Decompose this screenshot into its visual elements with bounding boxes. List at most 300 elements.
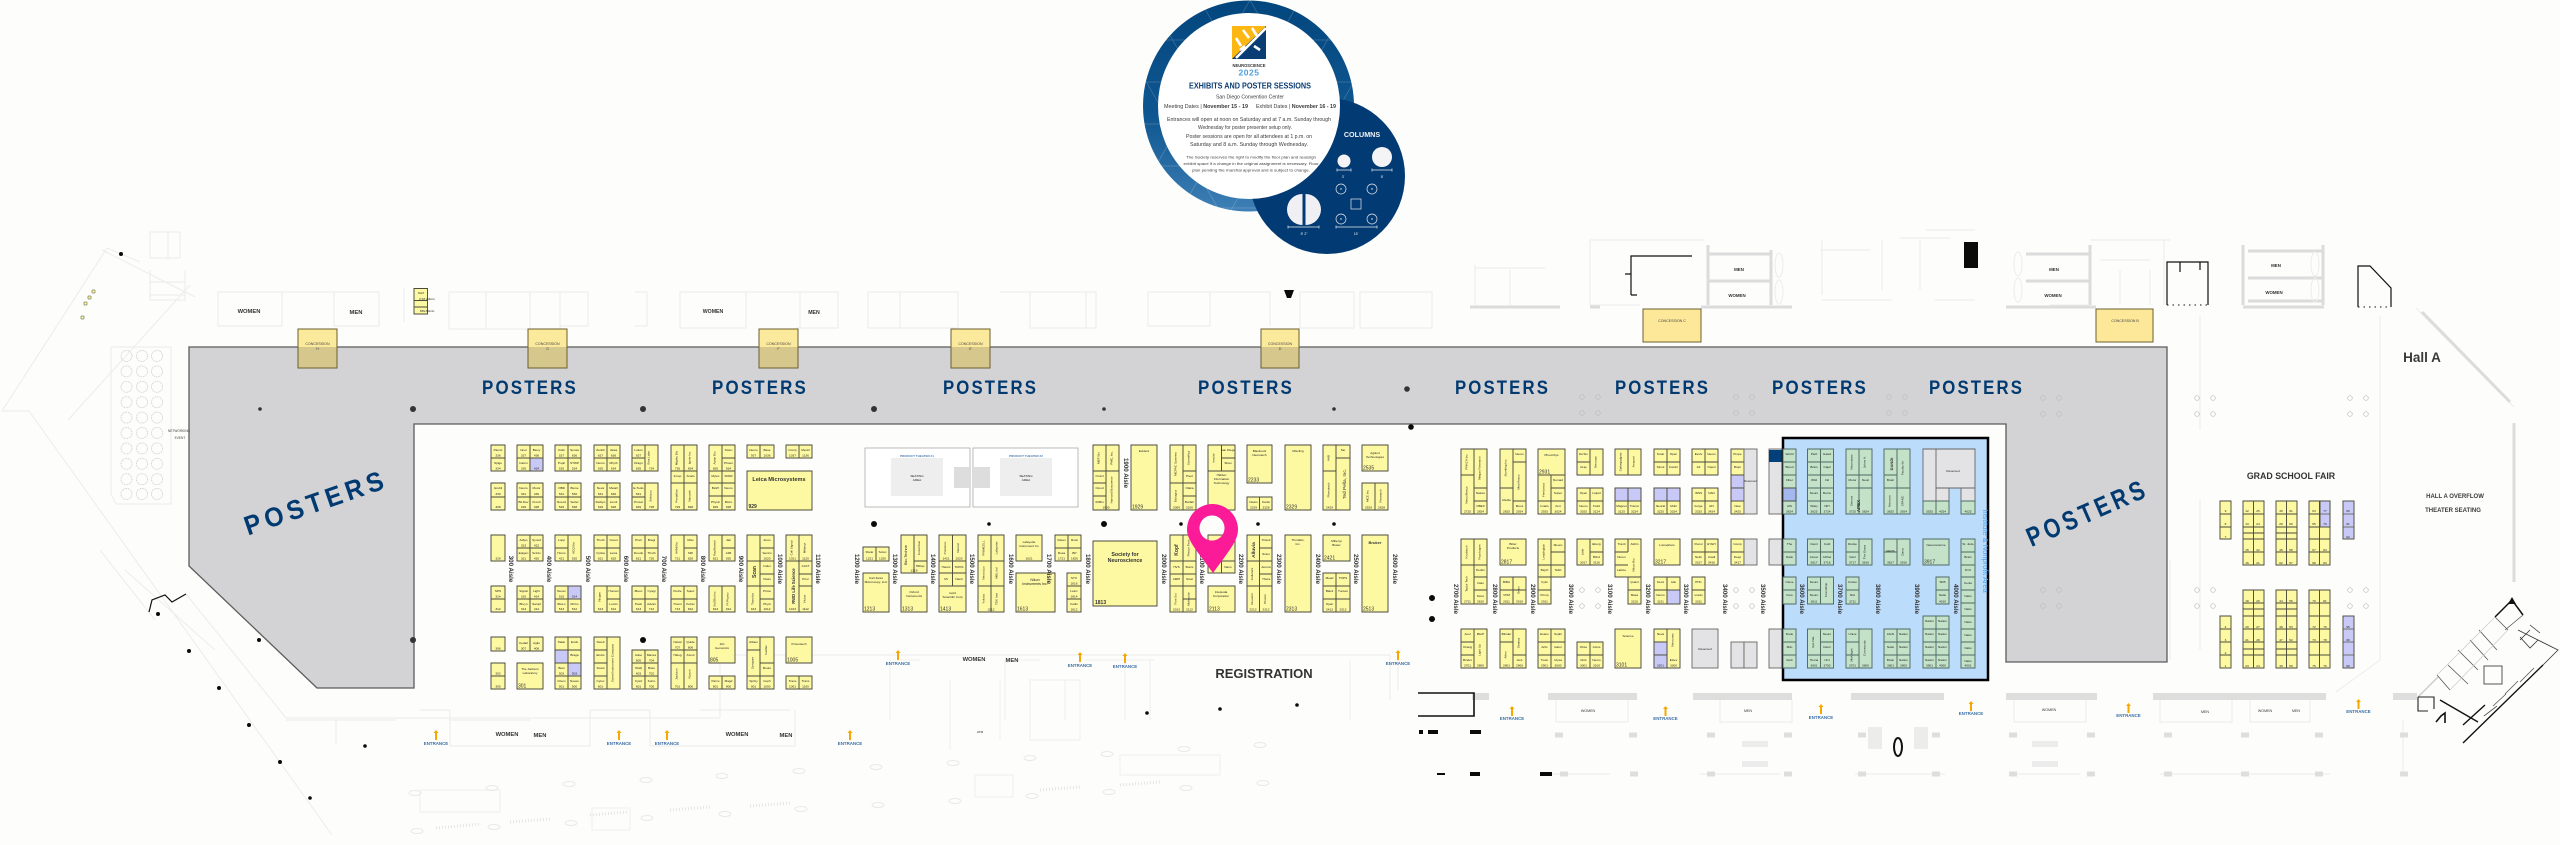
additional booth names, aisles 300 to 1100: Scien (725, 448, 733, 452)
institute and nonprofit area: Nation (1925, 619, 1934, 623)
institute and nonprofit area: Neuro (1810, 580, 1818, 584)
additional booth names, aisles 2700 to 3500: Tabb (1555, 568, 1562, 572)
additional booth names, aisles 300 to 1100: ACQ Bio (572, 542, 576, 554)
poster labels, top row: POSTERS (1772, 377, 1868, 399)
additional booth names, aisles 300 to 1100: Sampl (532, 602, 541, 606)
additional booth names, aisles 1200 to 2600: Scien (1262, 552, 1270, 556)
aisle labels: 1100 Aisle (814, 554, 821, 584)
institute and nonprofit area: UCI (1824, 658, 1830, 662)
additional booth names, aisles 300 to 1100: Ceph (763, 679, 771, 683)
exhibit booths: aisles 300 to 1100: Genomics (715, 646, 729, 650)
exhibit booths: aisles 300 to 1100: Cedarl (519, 641, 528, 645)
exhibit booths: aisles 300 to 1100: 503 (572, 672, 577, 676)
aisle labels: 2400 Aisle (1314, 554, 1321, 585)
additional booth names, aisles 2700 to 3500: Iturge (1695, 504, 1703, 508)
additional booth names, aisles 2700 to 3500: Lattice (1617, 568, 1626, 572)
additional booth names, aisles 1200 to 2600: Lafayette (994, 541, 998, 554)
exhibit booths: aisles 300 to 1100: 637 (598, 454, 603, 458)
exhibit booths: aisles 1200 to 2600: Gold (949, 591, 956, 595)
exhibit booths: aisles 300 to 1100: 514 (572, 594, 577, 598)
exhibit booths: aisles 2700 to 3500: 3424 (1708, 510, 1715, 514)
column markers (1580, 395, 2368, 608)
additional booth names, aisles 300 to 1100: Comp (788, 448, 797, 452)
aisle labels: 1700 Aisle (1045, 554, 1052, 585)
additional booth names, aisles 300 to 1100: AIM (726, 551, 732, 555)
additional booth names, aisles 300 to 1100: Jackson (674, 668, 678, 680)
exhibit booths: aisles 2700 to 3500: 2911 (1541, 600, 1548, 604)
exhibit booths: aisles 300 to 1100: Kwik (558, 448, 565, 452)
additional booth names, aisles 1200 to 2600: Phenotech (1326, 482, 1330, 497)
aisle labels: 3500 Aisle (1759, 584, 1766, 615)
exhibit booths: aisles 1200 to 2600: 2529 (1365, 506, 1372, 510)
institute and nonprofit area: Wiley (1810, 504, 1818, 508)
exhibit booths: aisles 300 to 1100: 805 (710, 658, 719, 664)
exhibit booths: aisles 300 to 1100: 628 (611, 505, 616, 509)
additional booth names, aisles 1200 to 2600: PRIMCELL (982, 540, 986, 556)
additional booth names, aisles 1200 to 2600: TEK Inst (994, 593, 998, 605)
additional booth names, aisles 300 to 1100: Speci (687, 589, 695, 593)
additional booth names, aisles 300 to 1100: Naval (674, 640, 682, 644)
additional booth names, aisles 2700 to 3500: Elsev (1670, 658, 1678, 662)
institute and nonprofit area: Faculty for (1900, 461, 1904, 475)
exhibit booths: aisles 300 to 1100: 603 (636, 672, 641, 676)
room labels: MEN (2292, 709, 2300, 713)
outer ring (1143, 0, 1354, 212)
exhibit booths: aisles 300 to 1100: 422 (534, 544, 539, 548)
exhibit booths: aisles 300 to 1100: Zenith (596, 448, 605, 452)
additional booth names, aisles 1200 to 2600: Nanti (955, 577, 963, 581)
additional booth names, aisles 1200 to 2600: Cloud (1095, 486, 1104, 490)
additional booth names, aisles 300 to 1100: Leica (610, 551, 617, 555)
exhibit booths: aisles 2700 to 3500: 2824 (1477, 510, 1484, 514)
additional booth names, aisles 1200 to 2600: Photon (1263, 594, 1267, 604)
grad school fair: 98 (2346, 664, 2350, 668)
additional booth names, aisles 300 to 1100: Fairfax (764, 645, 768, 655)
additional booth names, aisles 300 to 1100: Base (763, 448, 771, 452)
poster labels, top row: POSTERS (1455, 377, 1550, 399)
exhibit booths: aisles 2700 to 3500: 3417 (1734, 560, 1741, 564)
exhibit booths: aisles 300 to 1100: 412 (534, 607, 539, 611)
institute and nonprofit area: Cold (1824, 542, 1830, 546)
additional booth names, aisles 2700 to 3500: NeuroNexus (1464, 486, 1468, 504)
additional booth names, aisles 1200 to 2600: Triteck (1261, 538, 1271, 542)
exhibit booths: aisles 300 to 1100: 537 (559, 454, 564, 458)
additional booth names, aisles 300 to 1100: Neuro (596, 461, 605, 465)
exhibit booths: aisles 300 to 1100: 331 (521, 492, 526, 496)
exhibit booths: aisles 300 to 1100: 529 (559, 505, 564, 509)
additional booth names, aisles 2700 to 3500: INSS (1695, 491, 1702, 495)
institute and nonprofit area: Unive (1849, 632, 1857, 636)
exhibit booths: aisles 300 to 1100: Bione (571, 486, 579, 490)
exhibit booths: aisles 1200 to 2600: 2429 (1326, 506, 1333, 510)
exhibit booths: aisles 1200 to 2600: Biotec (1332, 543, 1341, 547)
additional booth names, aisles 300 to 1100: Jab (726, 538, 731, 542)
additional booth names, aisles 300 to 1100: Azian Bio (712, 451, 716, 465)
room labels: MEN (808, 310, 820, 316)
exhibit booths: aisles 300 to 1100: 329 (521, 505, 526, 509)
additional booth names, aisles 1200 to 2600: Fine Sci (1174, 593, 1178, 605)
additional booth names, aisles 1200 to 2600: Columbus (917, 541, 921, 555)
institute and nonprofit area: Natio (1964, 607, 1972, 611)
exhibit booths: aisles 300 to 1100: 334 (495, 466, 501, 470)
institute and nonprofit area: 3800 (1862, 664, 1869, 668)
exhibit booths: aisles 300 to 1100: Thoth (597, 538, 605, 542)
exhibit booths: aisles 1200 to 2600: Instruments Inc. (1022, 582, 1048, 586)
additional booth names, aisles 300 to 1100: Albam (749, 640, 758, 644)
additional booth names, aisles 2700 to 3500: Multi (1670, 504, 1677, 508)
grad school fair: 53 (2289, 625, 2293, 629)
additional booth names, aisles 1200 to 2600: Shan (1224, 461, 1232, 465)
exhibit booths: aisles 300 to 1100: OBill (558, 486, 565, 490)
grad school fair (2220, 471, 2354, 668)
exhibit booths: aisles 300 to 1100: 828 (688, 505, 693, 509)
additional booth names, aisles 2700 to 3500: Brain (1516, 586, 1520, 594)
additional booth names, aisles 1200 to 2600: TMOS (955, 565, 963, 569)
institute and nonprofit area: 3900 (1900, 664, 1907, 668)
institute and nonprofit area: Cleve (1786, 580, 1794, 584)
additional booth names, aisles 300 to 1100: BioPi (712, 486, 719, 490)
additional booth names, aisles 300 to 1100: Neuro (749, 448, 758, 452)
institute and nonprofit area: Nation (1925, 658, 1934, 662)
grad school fair: 64 (2312, 509, 2316, 513)
institute and nonprofit area: Brain (1887, 478, 1894, 482)
exhibit booths: aisles 300 to 1100: Scan (752, 566, 758, 578)
exhibit booths: aisles 2700 to 3500: 2901 (1541, 664, 1548, 668)
additional booth names, aisles 2700 to 3500: Nuren (1617, 555, 1626, 559)
additional booth names, aisles 2700 to 3500: Taylor Tech (1464, 576, 1468, 592)
exhibit booths: aisles 1200 to 2600: Technologies (1366, 455, 1384, 459)
concession stands: CONCESSION (766, 342, 791, 346)
exhibit booths: aisles 300 to 1100: Agile (533, 641, 540, 645)
additional booth names, aisles 2700 to 3500: Basa (1631, 593, 1638, 597)
exhibit booths: aisles 300 to 1100: 414 (534, 594, 539, 598)
institute and nonprofit area: Johns H. (1862, 456, 1866, 468)
institute and nonprofit area: 3600 Aisle (1798, 584, 1805, 615)
additional booth names, aisles 2700 to 3500: Nature (1476, 491, 1485, 495)
exhibit booths: aisles 1200 to 2600: Corporation (1213, 594, 1229, 598)
lower corridor walls along the entrance front (1398, 655, 2417, 775)
exhibit booths: aisles 300 to 1100: 621 (636, 556, 641, 560)
additional booth names, aisles 2700 to 3500: Prope (1733, 452, 1742, 456)
room labels: MEN (2201, 710, 2209, 714)
exhibit booths: aisles 1200 to 2600: Ted Pella, Inc. (1342, 469, 1348, 499)
exhibit booths: aisles 300 to 1100: Signal (519, 589, 528, 593)
additional booth names, aisles 2700 to 3500: BayO (1541, 568, 1549, 572)
additional booth names, aisles 1200 to 2600: Neural (956, 543, 960, 553)
networking event tables: NETWORKING (168, 429, 190, 433)
additional booth names, aisles 2700 to 3500: Allen (1504, 651, 1508, 658)
grad school fair: 45 (2279, 548, 2283, 552)
additional booth names, aisles 300 to 1100: Thoth (648, 551, 656, 555)
exhibit booths: aisles 2700 to 3500: 3211 (1657, 600, 1664, 604)
institute and nonprofit area: LifeN (1887, 632, 1894, 636)
small booths top left (81, 288, 435, 319)
exhibit booths: aisles 1200 to 2600: 2513 (1363, 606, 1374, 612)
aisle labels: 3200 Aisle (1644, 584, 1651, 615)
grad school fair: 78 (2323, 638, 2327, 642)
institute and nonprofit area: NIH (1824, 504, 1830, 508)
additional booth names, aisles 2700 to 3500: NAN (1708, 491, 1715, 495)
exhibit booths: aisles 2700 to 3500: 3224 (1631, 510, 1638, 514)
grad school fair: 57 (2289, 561, 2293, 565)
additional booth names, aisles 2700 to 3500: Sophi (1554, 632, 1562, 636)
institute and nonprofit area: Reserved (1946, 469, 1960, 473)
exhibit booths: aisles 300 to 1100: Manes (647, 653, 657, 657)
additional booth names, aisles 300 to 1100: Noeml (557, 500, 566, 504)
additional booth names, aisles 300 to 1100: SpiCy (749, 679, 758, 683)
additional booth names, aisles 1200 to 2600: Karsk (1262, 500, 1270, 504)
small booths top left: KTZ Admin (419, 297, 435, 301)
additional booth names, aisles 300 to 1100: RayBiotech (712, 540, 716, 556)
additional booth names, aisles 300 to 1100: Analo (687, 474, 695, 478)
grad school fair: 77 (2323, 509, 2327, 513)
floor plan base: faint walls and building outline (2, 232, 2514, 835)
exhibit booths: aisles 1200 to 2600: 1613 (1017, 606, 1028, 612)
additional booth names, aisles 300 to 1100: Rhyth (609, 461, 618, 465)
exhibit booths: aisles 300 to 1100: Scited Instrument Company (610, 643, 614, 682)
exhibit booths: aisles 300 to 1100: 920 (726, 556, 731, 560)
exhibit booths: aisles 2700 to 3500: Reserved (1698, 647, 1712, 651)
additional booth names, aisles 1200 to 2600: Biologics (1174, 489, 1178, 502)
exhibit booths: aisles 2700 to 3500: Products (1507, 546, 1520, 550)
columns circle (1249, 98, 1405, 254)
exhibit booths: aisles 300 to 1100: Takar (558, 640, 565, 644)
additional booth names, aisles 2700 to 3500: OBEX (1476, 504, 1485, 508)
additional booth names, aisles 300 to 1100: SPAR (724, 474, 733, 478)
exhibit booths: aisles 300 to 1100: Spige (494, 461, 502, 465)
aisle labels: 700 Aisle (660, 556, 667, 583)
additional booth names, aisles 300 to 1100: Noaxo (570, 679, 579, 683)
additional booth names, aisles 300 to 1100: Bruyn (519, 602, 528, 606)
logo (1232, 26, 1266, 78)
exhibit booths: aisles 300 to 1100: 1013 (789, 607, 796, 611)
institute and nonprofit area: SFB (1939, 580, 1946, 584)
exhibit booths: aisles 1200 to 2600: Lafayette (1023, 540, 1036, 544)
institute and nonprofit area: The Grass (1862, 544, 1866, 559)
grad school fair: 23 (2245, 664, 2249, 668)
additional booth names, aisles 2700 to 3500: Meuro (1554, 543, 1563, 547)
additional booth names, aisles 300 to 1100: Victus (802, 594, 806, 603)
additional booth names, aisles 300 to 1100: Endot (596, 653, 605, 657)
exhibit booths: aisles 2700 to 3500: 2701 (1464, 664, 1471, 668)
exhibit booths: aisles 1200 to 2600 (863, 445, 1388, 612)
institute and nonprofit area: DANDI (1889, 458, 1894, 470)
exhibit booths: aisles 300 to 1100: Neuro (519, 486, 528, 490)
aisle labels: 800 Aisle (699, 556, 706, 583)
exhibit booths: aisles 1200 to 2600: 1221 (866, 556, 873, 560)
additional booth names, aisles 1200 to 2600: Precision (943, 541, 947, 554)
exhibit booths: aisles 300 to 1100: 629 (598, 505, 603, 509)
exhibit booths: aisles 300 to 1100: Cyagi (648, 589, 656, 593)
entrance markers: ENTRANCE (655, 741, 679, 746)
exhibit booths: aisles 300 to 1100: 500 (572, 684, 577, 688)
exhibit booths: aisles 1200 to 2600: Thorlabs, (1292, 538, 1305, 542)
exhibit booths: aisles 2700 to 3500: 2811 (1503, 600, 1510, 604)
grad school fair: 29 (2279, 522, 2283, 526)
institute and nonprofit area: Natio (1939, 593, 1946, 597)
exhibit booths: aisles 2700 to 3500: 3210 (1631, 600, 1638, 604)
additional booth names, aisles 2700 to 3500: Quant (1630, 580, 1639, 584)
additional booth names, aisles 1200 to 2600: Rosa (1058, 551, 1065, 555)
institute and nonprofit area: Nation (1938, 658, 1947, 662)
aisle labels: 3300 Aisle (1682, 584, 1689, 615)
hall A corner rotated black structure (2418, 597, 2558, 743)
exhibit booths: aisles 2700 to 3500 (1461, 449, 1783, 668)
room labels: MEN (780, 733, 792, 739)
additional booth names, aisles 300 to 1100 (519, 448, 810, 683)
grad school fair: 49 (2279, 664, 2283, 668)
exhibit booths: aisles 1200 to 2600: Bruker (1369, 540, 1382, 545)
institute and nonprofit area: 3624 (1786, 510, 1793, 514)
additional booth names, aisles 1200 to 2600: HVS (1173, 565, 1180, 569)
additional booth names, aisles 300 to 1100: Scant (597, 666, 605, 670)
additional booth names, aisles 300 to 1100: Wolfj (635, 666, 642, 670)
additional booth names, aisles 2700 to 3500: Light Up (1478, 644, 1482, 656)
additional booth names, aisles 1200 to 2600: NeuroLux (982, 566, 986, 580)
white information disc: exhibit space if a change in the original assignment is necessary. Floor (1184, 161, 1319, 166)
exhibit booths: aisles 300 to 1100: 313 (521, 607, 526, 611)
institute and nonprofit area: 3611 (1811, 600, 1818, 604)
additional booth names, aisles 2700 to 3500: EYEH (1707, 542, 1716, 546)
additional booth names, aisles 2700 to 3500: urado (1695, 593, 1703, 597)
exhibit booths: aisles 1200 to 2600: Intelesda (1215, 590, 1228, 594)
additional booth names, aisles 2700 to 3500: Perkin (1476, 568, 1485, 572)
room labels: REGISTRATION (1215, 666, 1313, 681)
exhibit booths: aisles 1200 to 2600: 2312 (1263, 608, 1270, 612)
additional booth names, aisles 300 to 1100: Mentil (801, 448, 810, 452)
grad school fair: 61 (2289, 509, 2293, 513)
additional booth names, aisles 2700 to 3500: Eberg (1592, 542, 1601, 546)
exhibit booths: aisles 300 to 1100: 613 (636, 607, 641, 611)
exhibit booths: aisles 300 to 1100: 812 (688, 607, 693, 611)
additional booth names, aisles 300 to 1100: Pedre (673, 589, 682, 593)
additional booth names, aisles 300 to 1100: Azent (687, 653, 695, 657)
exhibit booths: aisles 300 to 1100: 535 (559, 466, 564, 470)
room labels: MEN (1734, 267, 1744, 272)
additional booth names, aisles 2700 to 3500: Cylix (1541, 580, 1548, 584)
aisle labels: 2500 Aisle (1352, 554, 1359, 585)
additional booth names, aisles 300 to 1100: Prior (802, 577, 809, 581)
exhibit booths: aisles 300 to 1100: 513 (559, 607, 564, 611)
exhibit booths: aisles 300 to 1100: 329 (495, 556, 501, 560)
institute and nonprofit area: 3800 Aisle (1874, 584, 1881, 615)
exhibit booths: aisles 300 to 1100: Pinci (635, 538, 642, 542)
additional booth names, aisles 2700 to 3500: BIBA (1503, 580, 1511, 584)
exhibit booths: aisles 300 to 1100: 929 (748, 504, 757, 510)
grad school fair: 7 (2225, 535, 2227, 539)
exhibit booths: aisles 300 to 1100: 634 (611, 466, 616, 470)
exhibit booths: aisles 300 to 1100: 821 (713, 556, 718, 560)
exhibit booths: aisles 1200 to 2600: 1721 (1058, 556, 1065, 560)
additional booth names, aisles 2700 to 3500: Simul (1657, 465, 1665, 469)
additional booth names, aisles 2700 to 3500: VHM (1503, 593, 1510, 597)
institute and nonprofit area: Wild (1811, 478, 1817, 482)
exhibit booths: aisles 300 to 1100: iBeco (635, 589, 643, 593)
exhibit booths: aisles 300 to 1100: 635 (636, 466, 641, 470)
additional booth names, aisles 2700 to 3500: Neva (1657, 632, 1664, 636)
additional booth names, aisles 2700 to 3500: Little (1580, 548, 1584, 555)
grad school fair: 67 (2312, 548, 2316, 552)
institute and nonprofit area: Natio (1964, 594, 1972, 598)
grad school fair: 8 (2225, 522, 2227, 526)
institute and nonprofit area: 3717 (1849, 560, 1856, 564)
room labels: WOMEN (2044, 293, 2062, 298)
institute and nonprofit area: World (1785, 452, 1794, 456)
additional booth names, aisles 1200 to 2600: Mt (944, 577, 948, 581)
exhibit booths: aisles 300 to 1100: 315 (521, 594, 526, 598)
entrance markers: ENTRANCE (1809, 715, 1833, 720)
grad school fair: 56 (2289, 599, 2293, 603)
additional booth names, aisles 2700 to 3500: Blind (1593, 555, 1600, 559)
grad school fair: 24 (2256, 664, 2260, 668)
exhibit booths: aisles 300 to 1100: 1012 (764, 607, 771, 611)
exhibit booths: aisles 2700 to 3500: 2900 (1516, 664, 1523, 668)
exhibit booths: aisles 1200 to 2600: Scientific Corp (943, 595, 963, 599)
additional booth names, aisles 2700 to 3500: Imaris (1540, 504, 1549, 508)
exhibit booths: aisles 1200 to 2600: 1421 (943, 556, 950, 560)
aisle labels: 2000 Aisle (1160, 554, 1167, 585)
institute and nonprofit area: 3825 (1887, 510, 1894, 514)
posters area background (189, 347, 2167, 688)
institute and nonprofit area: Institute & Nonprofit Area (1981, 509, 1990, 594)
additional booth names, aisles 1200 to 2600: Aurora (1261, 565, 1271, 569)
exhibit booths: aisles 2700 to 3500: 3024 (1555, 510, 1562, 514)
exhibit booths: aisles 300 to 1100: 621 (598, 556, 603, 560)
additional booth names, aisles 1200 to 2600: Bonis (1186, 565, 1194, 569)
exhibit booths: aisles 300 to 1100: Inner (520, 448, 527, 452)
exhibit booths: aisles 300 to 1100: 330 (495, 492, 501, 496)
institute and nonprofit area: Natio (1964, 633, 1972, 637)
access notes: Entrances will open at noon on Saturday and at 7 a.m. Sunday through (1167, 117, 1331, 123)
exhibit booths: aisles 300 to 1100: 336 (495, 454, 501, 458)
exhibit booths: aisles 2700 to 3500: 3311 (1695, 600, 1702, 604)
additional booth names, aisles 2700 to 3500: Ask (1671, 580, 1677, 584)
additional booth names, aisles 2700 to 3500: Comp (1733, 542, 1742, 546)
additional booth names, aisles 300 to 1100: Bioto (648, 666, 655, 670)
grad school fair: 28 (2256, 638, 2260, 642)
additional booth names, aisles 2700 to 3500: Axol (1464, 632, 1471, 636)
additional booth names, aisles 1200 to 2600: Noam (1249, 500, 1258, 504)
exhibit booths: aisles 300 to 1100: 1000 (764, 684, 771, 688)
additional booth names, aisles 300 to 1100: Ignite Inc (688, 451, 692, 464)
additional booth names, aisles 300 to 1100: Deblyo (596, 500, 606, 504)
concession stands: CONCESSION (305, 342, 330, 346)
exhibit booths: aisles 300 to 1100: 323 (521, 544, 526, 548)
grad school fair: 62 (2279, 561, 2283, 565)
grad school fair: 79 (2323, 625, 2327, 629)
additional booth names, aisles 2700 to 3500: Aradi (1708, 555, 1715, 559)
grad school fair: GRAD SCHOOL FAIR (2247, 471, 2336, 481)
additional booth names, aisles 1200 to 2600: BP (1072, 551, 1077, 555)
additional booth names, aisles 300 to 1100: Indus (763, 564, 771, 568)
institute and nonprofit area: Nation (1938, 619, 1947, 623)
poster labels, top row: POSTERS (482, 377, 578, 399)
room labels: MEN (350, 310, 362, 316)
exhibit booths: aisles 300 to 1100: Grobli (494, 486, 502, 490)
institute and nonprofit area: The (1787, 542, 1792, 546)
exhibit booths: aisles 300 to 1100: 701 (675, 684, 680, 688)
exhibit booths: aisles 1200 to 2600: 2009 (1173, 506, 1180, 510)
aisle labels: 1400 Aisle (929, 554, 936, 585)
product theaters: AREA (1022, 478, 1031, 482)
additional booth names, aisles 300 to 1100: Epigen (519, 551, 529, 555)
exhibit booths: aisles 300 to 1100: Laboratory (523, 671, 538, 675)
exhibit booths: aisles 300 to 1100: Jaisa (610, 448, 617, 452)
exhibit booths: aisles 2700 to 3500: 3425 (1734, 510, 1741, 514)
additional booth names, aisles 300 to 1100: Magd (725, 679, 733, 683)
poster labels, top row: POSTERS (943, 377, 1038, 399)
institute and nonprofit area: AIS (1787, 504, 1792, 508)
